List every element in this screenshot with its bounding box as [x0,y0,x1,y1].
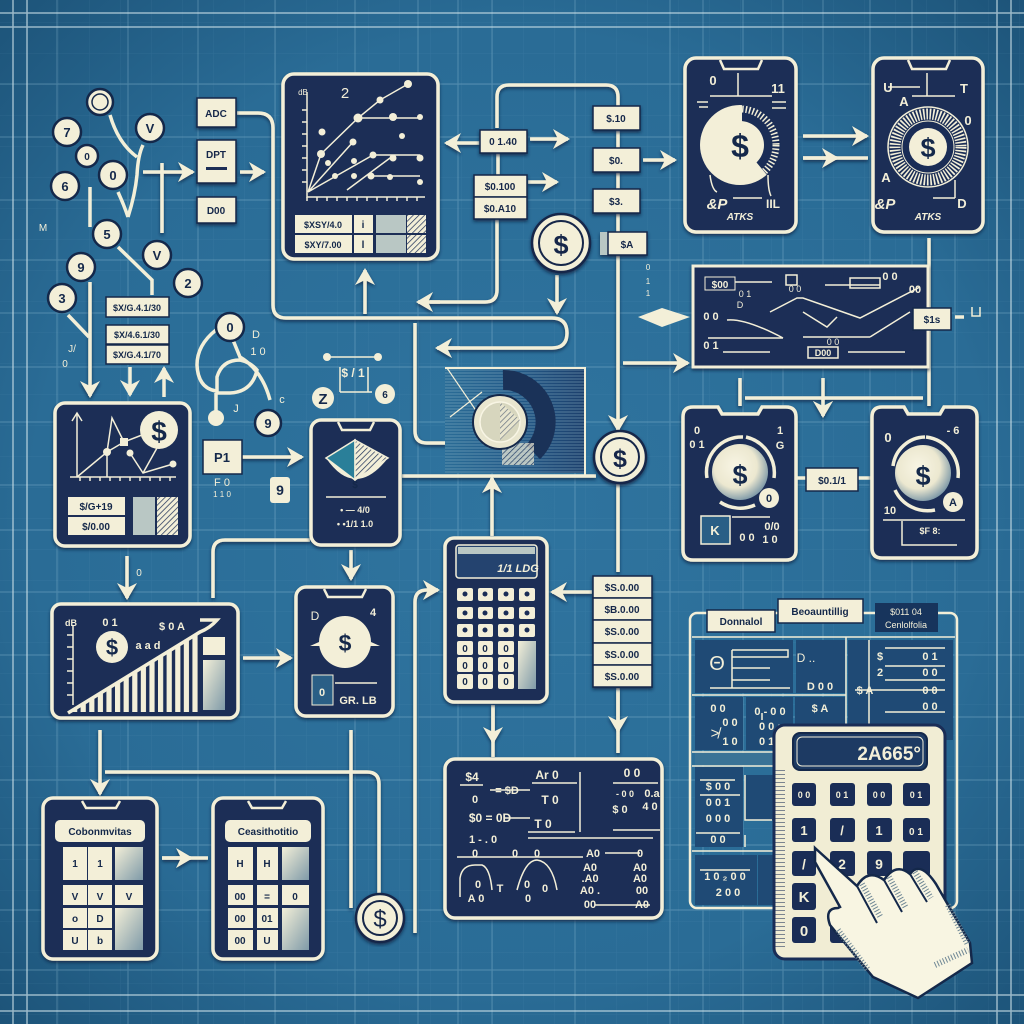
coin node: 5 [103,227,111,242]
margin marks: 0 [62,359,68,370]
connector lines [90,85,929,933]
marks: small notes: 1 [646,277,651,286]
panel: formula board: T 0 [534,817,552,831]
calculator keys: 1 [875,823,883,838]
phone: bottom right calculator: 0 [292,892,298,903]
panel: formula board: 0 [525,893,531,905]
phone: right lower left: 1 [777,425,783,437]
phone: bottom right calculator: Ceasithotitio [238,827,298,838]
phone: top right dollar dial: 0 [964,113,972,128]
label: side tag: $1s [924,315,941,326]
phone: top left dollar dial: $ [731,128,749,164]
diagram: small network: Z [318,391,328,408]
panel: wide schematic: 0 0 [703,311,719,323]
coin node: 3 [58,291,66,306]
labels: top-left boxes: D00 [207,206,226,217]
phone: right lower left: $ [732,460,748,490]
coin node [51,172,79,200]
panel: formula board [445,759,662,918]
panel: formula board: 0 [542,883,548,895]
phone: top left dollar dial: 11 [771,81,785,96]
phone: right lower right: 10 [884,505,896,517]
calculator keys: 9 [875,856,883,872]
diagram: small network: 6 [382,390,388,401]
calculator display: 2A665° [857,744,921,765]
coin node: 7 [63,125,71,140]
coin node: V [153,248,162,263]
labels: arrows cluster middle top: 0 1.40 [489,137,517,148]
phone: top right dollar dial: T [960,81,968,96]
panel: wide rising wedge chart: dB [65,618,77,628]
panel: spreadsheet: D .. [797,651,815,665]
arrows: from table to panel [130,367,164,397]
phone: bottom right calculator: 00 [234,936,246,947]
panel: spreadsheet: 0 0 [710,703,726,715]
phone: mid dollar dial: 0 [319,687,325,699]
calculator keys: 1 [800,823,808,838]
phone: top right dollar dial: A [881,170,891,185]
diagram: orbit nodes: 0 [226,320,234,335]
coin node [136,114,164,142]
phone: bottom left calculator: U [71,936,79,947]
tabs: spreadsheet headers: $011 04 [890,607,922,617]
calculator: center: 0 [462,644,468,655]
phone: top left dollar dial: IIL [766,197,780,211]
label: connector tag: $0.1/1 [818,476,846,487]
panel: left chart with dollar: $/G+19 [79,502,113,513]
panel: formula board: T [497,883,504,895]
phone: bottom left calculator: D [96,914,104,925]
panel: formula board: A0 [583,862,597,874]
phone: bottom left calculator: V [126,892,133,903]
labels: top-left boxes [197,98,236,223]
calculator keys: 0 1 [909,827,923,838]
panel: wide schematic: 0 1 [739,289,751,299]
panel: formula board: $4 [465,770,479,784]
calculator: center: 0 [503,677,509,688]
phone: bottom right calculator: 00 [234,892,246,903]
coin: center dollar: $ [613,445,627,473]
panel: spreadsheet: 0 0 [922,701,938,713]
phone: bottom right calculator: H [263,859,271,870]
diagram: orbit nodes [197,313,285,436]
tabs: spreadsheet headers [707,599,938,632]
panel: formula board: 00 [584,899,596,911]
phone: right lower right [872,407,977,558]
panel: wide schematic: D00 [815,348,831,358]
panel: spreadsheet: 0 0 [722,717,738,729]
phone: top right dollar dial [873,58,983,232]
phone: right lower right: $F 8: [919,526,941,536]
calculator: center: 0 [482,677,488,688]
labels: vertical stack: $.10 [606,114,626,125]
phone: bottom right calculator: = [264,892,270,903]
panel: left chart with dollar: $/0.00 [82,522,110,533]
coin node [174,269,202,297]
panel: formula board: 0 [472,848,478,860]
phone: bottom left calculator: V [72,892,79,903]
coin node [76,145,98,167]
calculator: center: 0 [462,661,468,672]
calculator: large with hand [774,725,945,959]
panel: formula board: - 0 0 [616,789,634,799]
labels: vertical stack: $3. [609,197,623,208]
panel: spreadsheet: 0 0 1 [706,797,730,809]
panel: top line chart: dB [298,88,308,97]
phone: top left dollar dial: &P [707,196,728,213]
panel: spreadsheet: 2 [877,667,883,679]
coin node: 6 [61,179,69,194]
coin node [87,89,113,115]
panel: wide rising wedge chart [52,604,238,718]
panel: spreadsheet: 0 0 [922,685,938,697]
phone: bottom right calculator: 01 [261,914,273,925]
phone: mid dollar dial: D [311,609,320,623]
phone: center box icon: • — 4/0 [340,505,370,515]
panel: spreadsheet: 2 0 0 [716,887,740,899]
table: three row labels: $X/G.4.1/70 [113,350,161,360]
table: three row labels: $X/4.6.1/30 [114,330,160,340]
phone: right lower right: 0 [884,430,892,445]
labels: arrows cluster middle top [474,130,527,219]
calculator keys: 2 [838,856,846,872]
phone: right lower right: A [949,497,957,509]
marks: small notes: 1 [646,289,651,298]
table: five value labels: $S.0.00 [605,627,640,638]
panel: wide rising wedge chart: a a d [135,640,161,652]
panel: spreadsheet: $ [877,651,883,663]
panel: coin tree [48,89,202,337]
panel: wide schematic: D [737,300,744,310]
phone: right lower left: 0 1 [689,439,705,451]
calculator: center: 0 [503,644,509,655]
table: three row labels: $X/G.4.1/30 [113,303,161,313]
diagram: orbit nodes: J [233,403,239,415]
panel: top line chart: l [362,240,365,251]
panel: formula board: = $D [495,785,519,797]
panel: formula board: $0 = 0D [469,811,512,825]
tabs: spreadsheet headers: Donnalol [720,617,763,628]
panel: spreadsheet: 1 0 ₂ 0 0 [704,871,746,883]
coin: center dollar [594,431,646,483]
panel: spreadsheet: 0 - 0 0 [754,706,786,718]
tabs: spreadsheet headers: Beoauntillig [791,607,849,618]
coin: top dollar [532,214,590,272]
diagram: orbit nodes: 1 0 [250,346,266,358]
panel: formula board: A 0 [468,893,484,905]
panel: spreadsheet: $ A [812,703,828,715]
label: P1 tag: 9 [276,482,284,498]
panel: wide schematic: 0 1 [703,340,719,352]
panel: spreadsheet: Θ [709,653,725,675]
panel: left chart with dollar [55,403,190,546]
panel: formula board: 0 [475,879,481,891]
margin marks: J/ [68,344,76,355]
phone: top right dollar dial: &P [875,196,896,213]
phone: bottom right calculator [213,798,323,959]
coin node: 0 [109,168,117,183]
table: five value labels: $B.0.00 [604,605,640,616]
calculator keys: / [802,856,806,872]
phone: right lower right: $ [915,461,931,491]
phone: mid dollar dial [296,587,393,716]
panel: spreadsheet: 0 0 [922,667,938,679]
phone: right lower right: - 6 [947,425,959,437]
phone: center box icon [311,420,400,545]
table: five value labels [593,576,652,687]
phone: bottom left calculator: o [72,914,78,925]
phone: bottom left calculator: V [97,892,104,903]
diagram: orbit nodes: D [252,329,260,341]
phone: right lower left: 0 [694,425,700,437]
phone: right lower left: 1 0 [762,534,778,546]
label: connector tag [796,468,872,491]
phone: bottom right calculator: 00 [234,914,246,925]
panel: formula board: 0 [512,848,518,860]
coin: bottom dollar: $ [373,906,387,933]
phone: bottom left calculator: 1 [97,859,103,870]
panel: spreadsheet: 0 0 [710,834,726,846]
phone: top right dollar dial: D [957,196,967,211]
phone: bottom left calculator [43,798,157,959]
panel: top line chart: $XSY/4.0 [304,220,342,230]
phone: mid dollar dial: 4 [370,607,377,619]
phone: bottom left calculator: b [97,936,103,947]
calculator keys: 0 1 [836,790,848,800]
phone: right lower left: G [776,440,784,452]
calculator keys: K [799,889,810,906]
panel: wide schematic: $00 [712,280,729,291]
icon: pointing hand [815,848,972,998]
calculator: center: 0 [462,677,468,688]
margin marks [39,223,142,579]
panel: wide schematic: 0 0 [827,337,839,347]
tabs: spreadsheet headers: Cenlolfolia [885,620,927,630]
diagram: small network [312,353,395,409]
labels: vertical stack [593,106,647,255]
phone: bottom right calculator: H [236,859,244,870]
panel: formula board: A0 [586,848,600,860]
panel: spreadsheet: $ 0 0 [706,781,730,793]
panel: formula board: .A0 [581,873,599,885]
panel: formula board: 0 [534,848,540,860]
panel: wide rising wedge chart: 0 1 [102,617,118,629]
panel: formula board: 1 - . 0 [469,834,497,846]
phone: right lower left: K [710,523,720,538]
calculator: center: 0 [503,661,509,672]
labels: arrows cluster middle top: $0.A10 [484,204,517,215]
phone: top left dollar dial: 0 [709,73,717,88]
image: central blueprint dial [445,368,585,475]
panel: spreadsheet: 0 0 0 [706,813,730,825]
phone: top right dollar dial: A [899,94,909,109]
phone: right lower left [683,407,796,560]
table: five value labels: $S.0.00 [605,672,640,683]
phone: top right dollar dial: $ [920,133,936,163]
calculator display [793,733,927,770]
panel: formula board: $ 0 [612,804,628,816]
panel: wide schematic: 0 0 [789,284,801,294]
phone: top left dollar dial [685,58,796,232]
calculator: center: 0 [482,661,488,672]
label: P1 tag: 1 1 0 [213,490,231,499]
calculator keys [792,783,930,943]
coin node [48,284,76,312]
panel: spreadsheet: $ A [857,685,873,697]
panel: top line chart: $XY/7.00 [304,240,342,250]
panel: formula board: T 0 [541,793,559,807]
phone: right lower left: 0 0 [739,532,755,544]
panel: spreadsheet: ≯ [711,725,722,742]
phone: center box icon: • •1/1 1.0 [337,519,373,529]
phone: bottom right calculator: U [263,936,271,947]
panel: spreadsheet: 0 1 : [759,736,781,748]
labels: vertical stack: $A [621,240,633,251]
phone: top left dollar dial: ATKS [726,212,754,223]
marks: small notes [646,263,651,298]
panel: formula board: 0 0 [624,766,641,780]
panel: formula board: A0 [633,873,647,885]
panel: formula board: 00 [636,885,648,897]
coin node: V [146,121,155,136]
phone: top right dollar dial: ATKS [914,212,942,223]
coin node [53,118,81,146]
labels: top-left boxes: ADC [205,109,227,120]
calculator: center: 0 [482,644,488,655]
phone: top right dollar dial: U [883,80,893,95]
phone: bottom left calculator: Cobonmvitas [68,827,132,838]
diagram: small network: $ / 1 [341,366,365,380]
coin node: 9 [77,260,85,275]
panel: top line chart: 2 [341,85,349,102]
icon: diamond pointer [638,308,690,327]
phone: bottom left calculator: 1 [72,859,78,870]
table: five value labels: $S.0.00 [605,583,640,594]
panel: top line chart: i [362,220,365,231]
panel: wide rising wedge chart: $ 0 A [159,621,185,633]
margin marks: M [39,223,47,234]
panel: formula board: 0.a [644,788,661,800]
panel: formula board: 0 [637,848,643,860]
panel: formula board: 4 0 [642,801,658,813]
phone: right lower left: 0 [766,493,772,505]
coin node [99,161,127,189]
coin node: 0 [84,152,90,163]
panel: formula board: A0 [635,899,649,911]
panel: formula board: A0 . [580,885,600,897]
calculator: center [445,538,547,702]
table: five value labels: $S.0.00 [605,650,640,661]
phone: mid dollar dial: $ [339,630,352,656]
phone: center box icon: $ [352,480,358,491]
margin marks: 0 [136,568,142,579]
panel: spreadsheet [690,613,957,908]
calculator keys: 0 [800,923,808,940]
label: P1 tag: F 0 [214,477,230,489]
panel: spreadsheet: 1 0 [722,736,738,748]
panel: wide rising wedge chart: $ [106,635,118,660]
panel: spreadsheet: 0 1 [922,651,938,663]
phone: mid dollar dial: GR. LB [339,695,377,707]
coin node [93,220,121,248]
label: P1 tag [203,440,290,503]
panel: top line chart [283,74,438,259]
coin: top dollar: $ [553,230,569,260]
coin: bottom dollar [356,894,404,942]
panel: spreadsheet: 0 0 : [759,721,781,733]
calculator keys: 0 0 [798,790,810,800]
panel: wide schematic: 00 [909,284,921,296]
labels: vertical stack: $0. [609,156,623,167]
phone: right lower left: 0/0 [764,521,780,533]
coin node [143,241,171,269]
labels: top-left boxes: DPT [206,150,226,161]
panel: left chart with dollar: $ [151,416,167,447]
panel: formula board: Ar 0 [535,768,559,782]
marks: small notes: 0 [646,263,651,272]
coin node: 2 [184,276,192,291]
panel: formula board: A0 [633,862,647,874]
panel: formula board: 0 [472,794,478,806]
labels: arrows cluster middle top: $0.100 [485,182,516,193]
calculator: center: 1/1 LDG [497,563,539,575]
diagram: orbit nodes: 9 [264,416,272,431]
panel: wide schematic: 0 0 [882,271,898,283]
diagram: orbit nodes: c [279,394,285,406]
calculator keys: 0 0 [873,790,885,800]
label: P1 tag: P1 [214,450,230,465]
label: side tag [913,307,980,330]
panel: wide schematic [693,266,928,367]
panel: spreadsheet: D 0 0 [807,681,833,693]
coin node [67,253,95,281]
calculator keys: 0 1 [910,790,922,800]
table: three row labels [106,297,169,364]
calculator keys: / [840,823,844,838]
panel: formula board: 0 [524,879,530,891]
